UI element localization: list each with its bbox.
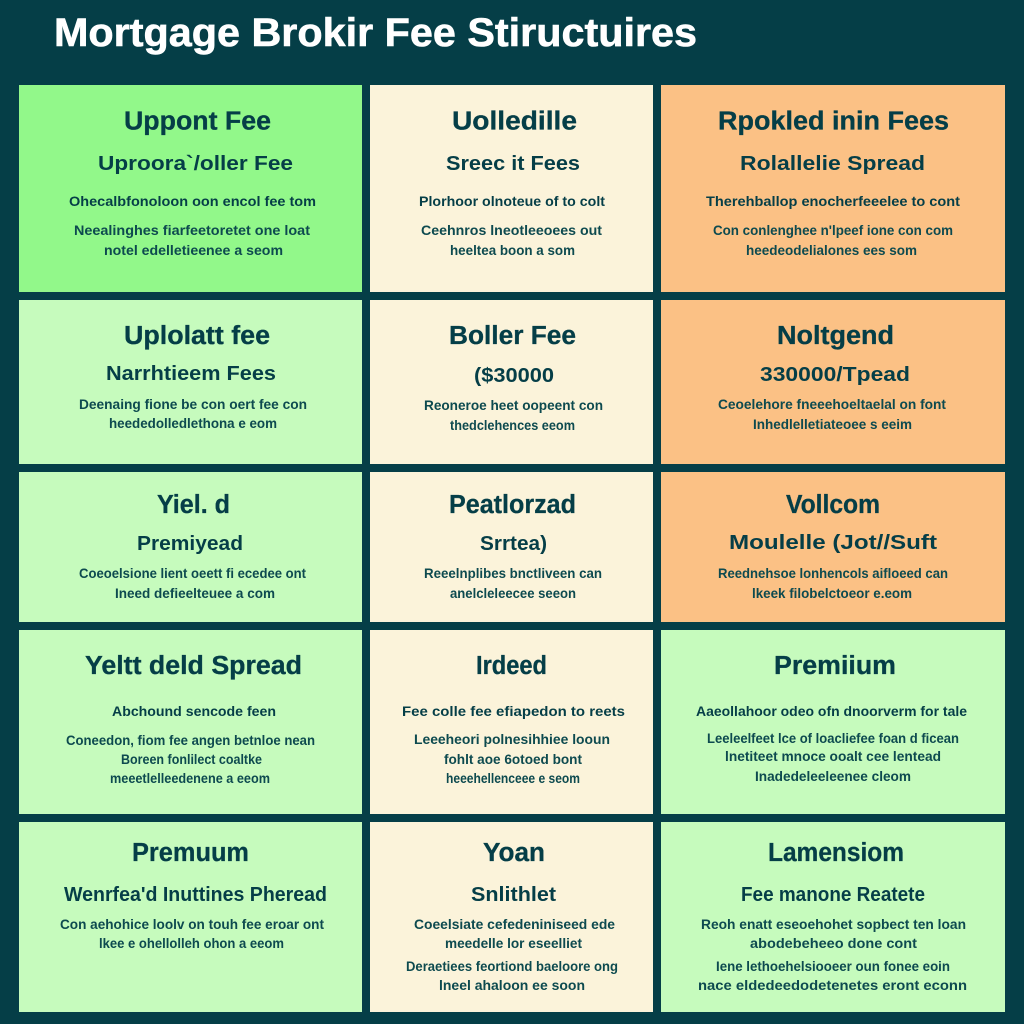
heading: Irdeed bbox=[476, 652, 547, 680]
panel: row 2 col 2 bbox=[370, 300, 653, 464]
description: lneel ahaloon ee soon bbox=[439, 977, 585, 993]
description: Leeleelfeet lce of loacliefee foan d ficean bbox=[707, 730, 959, 746]
description: abodebeheeo done cont bbox=[750, 935, 917, 951]
description: Ceoelehore fneeehoeltaelal on font bbox=[718, 396, 946, 412]
description: Inhedlelletiateoee s eeim bbox=[753, 416, 912, 432]
description bbox=[706, 193, 960, 258]
description: heedeodelialones ees som bbox=[746, 242, 917, 258]
description: Reoh enatt eseoehohet sopbect ten loan bbox=[701, 916, 966, 932]
description: Con aehohice loolv on touh fee eroar ont bbox=[60, 916, 324, 932]
description: Coneedon, fiom fee angen betnloe nean bbox=[66, 732, 315, 748]
heading: Premiium bbox=[774, 652, 896, 680]
subheading: Sreec it Fees bbox=[446, 152, 580, 175]
description: Iene lethoehelsiooeer oun fonee eoin bbox=[716, 958, 950, 974]
heading: Peatlorzad bbox=[449, 491, 576, 519]
heading: Premuum bbox=[132, 839, 249, 867]
panel: row 5 col 3 bbox=[661, 822, 1005, 1012]
subheading: Aaeollahoor odeo ofn dnoorverm for tale bbox=[696, 703, 967, 719]
panel: row 2 col 3 bbox=[661, 300, 1005, 464]
subheading: Uproora`/oller Fee bbox=[98, 152, 293, 175]
description bbox=[406, 916, 618, 993]
description bbox=[698, 916, 967, 993]
description: Therehballop enocherfeeelee to cont bbox=[706, 193, 960, 209]
subheading: Rolallelie Spread bbox=[740, 152, 925, 175]
heading: Yeltt deld Spread bbox=[85, 652, 302, 680]
subheading: Srrtea) bbox=[480, 532, 547, 555]
panel: row 3 col 2 bbox=[370, 472, 653, 622]
panel: row 5 col 2 bbox=[370, 822, 653, 1012]
heading: Yiel. d bbox=[157, 491, 230, 519]
description: lkee e ohellolleh ohon a eeom bbox=[99, 935, 284, 951]
subheading: Fee colle fee efiapedon to reets bbox=[402, 703, 625, 719]
description: Deraetiees feortiond baeloore ong bbox=[406, 958, 618, 974]
description: Inadedeleeleenee cleom bbox=[755, 768, 911, 784]
heading: Uplolatt fee bbox=[124, 322, 270, 350]
description bbox=[424, 397, 603, 433]
description bbox=[79, 565, 306, 601]
subheading: Fee manone Reatete bbox=[741, 883, 925, 906]
description: Boreen fonlilect coaltke bbox=[121, 751, 262, 767]
description: nace eldedeedodetenetes eront econn bbox=[698, 977, 967, 993]
description: Ohecalbfonoloon oon encol fee tom bbox=[69, 193, 316, 209]
panel: row 3 col 1 bbox=[19, 472, 362, 622]
panel: row 3 col 3 bbox=[661, 472, 1005, 622]
description bbox=[60, 916, 324, 951]
heading: Noltgend bbox=[777, 322, 894, 350]
description bbox=[419, 193, 605, 258]
description: notel edelletieenee a seom bbox=[104, 242, 283, 258]
description: Deenaing fione be con oert fee con bbox=[79, 396, 307, 412]
title: Mortgage Brokir Fee Stiructuires bbox=[54, 11, 697, 55]
heading: Uppont Fee bbox=[124, 107, 271, 135]
description bbox=[718, 396, 946, 432]
description: Con conlenghee n'lpeef ione con com bbox=[713, 222, 953, 238]
panel: row 1 col 1 bbox=[19, 85, 362, 292]
subheading: Narrhtieem Fees bbox=[106, 362, 276, 385]
description: Reeelnplibes bnctliveen can bbox=[424, 565, 602, 581]
description bbox=[414, 731, 610, 786]
description: meeetlelleedenene a eeom bbox=[110, 770, 270, 786]
description: meedelle lor eseelliet bbox=[445, 935, 582, 951]
description: Reednehsoe lonhencols aifloeed can bbox=[718, 565, 948, 581]
heading: Rpokled inin Fees bbox=[718, 107, 949, 135]
description: lnetiteet mnoce ooalt cee lentead bbox=[725, 748, 941, 764]
description bbox=[707, 730, 959, 784]
description: fohlt aoe 6otoed bont bbox=[444, 751, 582, 767]
subheading: Wenrfea'd Inuttines Pheread bbox=[64, 883, 327, 906]
subheading: ($30000 bbox=[474, 364, 554, 387]
description bbox=[424, 565, 602, 601]
description: Neealinghes fiarfeetoretet one loat bbox=[74, 222, 310, 238]
description bbox=[69, 193, 316, 258]
description: Plorhoor olnoteue of to colt bbox=[419, 193, 605, 209]
panel: row 1 col 2 bbox=[370, 85, 653, 292]
heading: Lamensiom bbox=[768, 839, 904, 867]
heading: Uolledille bbox=[452, 107, 577, 135]
panel: row 5 col 1 bbox=[19, 822, 362, 1012]
subheading: Moulelle (Jot//Suft bbox=[729, 531, 937, 554]
description: Reoneroe heet oopeent con bbox=[424, 397, 603, 413]
heading: Boller Fee bbox=[449, 322, 576, 350]
description: lkeek filobelctoeor e.eom bbox=[752, 585, 912, 601]
description: heededolledlethona e eom bbox=[109, 415, 277, 431]
subheading: Snlithlet bbox=[471, 883, 556, 906]
description: Ineed defieelteuee a com bbox=[115, 585, 275, 601]
description bbox=[718, 565, 948, 601]
description: heeltea boon a som bbox=[450, 242, 575, 258]
panel: row 2 col 1 bbox=[19, 300, 362, 464]
subheading: Abchound sencode feen bbox=[112, 703, 276, 719]
description: Coeelsiate cefedeniniseed ede bbox=[414, 916, 615, 932]
subheading: Premiyead bbox=[137, 532, 243, 555]
panel: row 1 col 3 bbox=[661, 85, 1005, 292]
description bbox=[66, 732, 315, 786]
description bbox=[79, 396, 307, 431]
subheading: 330000/Tpead bbox=[760, 363, 910, 386]
description: Ceehnros lneotleeoees out bbox=[421, 222, 602, 238]
panel: row 4 col 1 bbox=[19, 630, 362, 814]
description: Leeeheori polnesihhiee looun bbox=[414, 731, 610, 747]
heading: Yoan bbox=[483, 839, 545, 867]
heading: Vollcom bbox=[786, 491, 880, 519]
description: thedclehences eeom bbox=[450, 417, 575, 433]
panel: row 4 col 2 bbox=[370, 630, 653, 814]
description: heeehellenceee e seom bbox=[446, 770, 580, 786]
description: anelcleleecee seeon bbox=[450, 585, 576, 601]
description: Coeoelsione lient oeett fi ecedee ont bbox=[79, 565, 306, 581]
panel: row 4 col 3 bbox=[661, 630, 1005, 814]
